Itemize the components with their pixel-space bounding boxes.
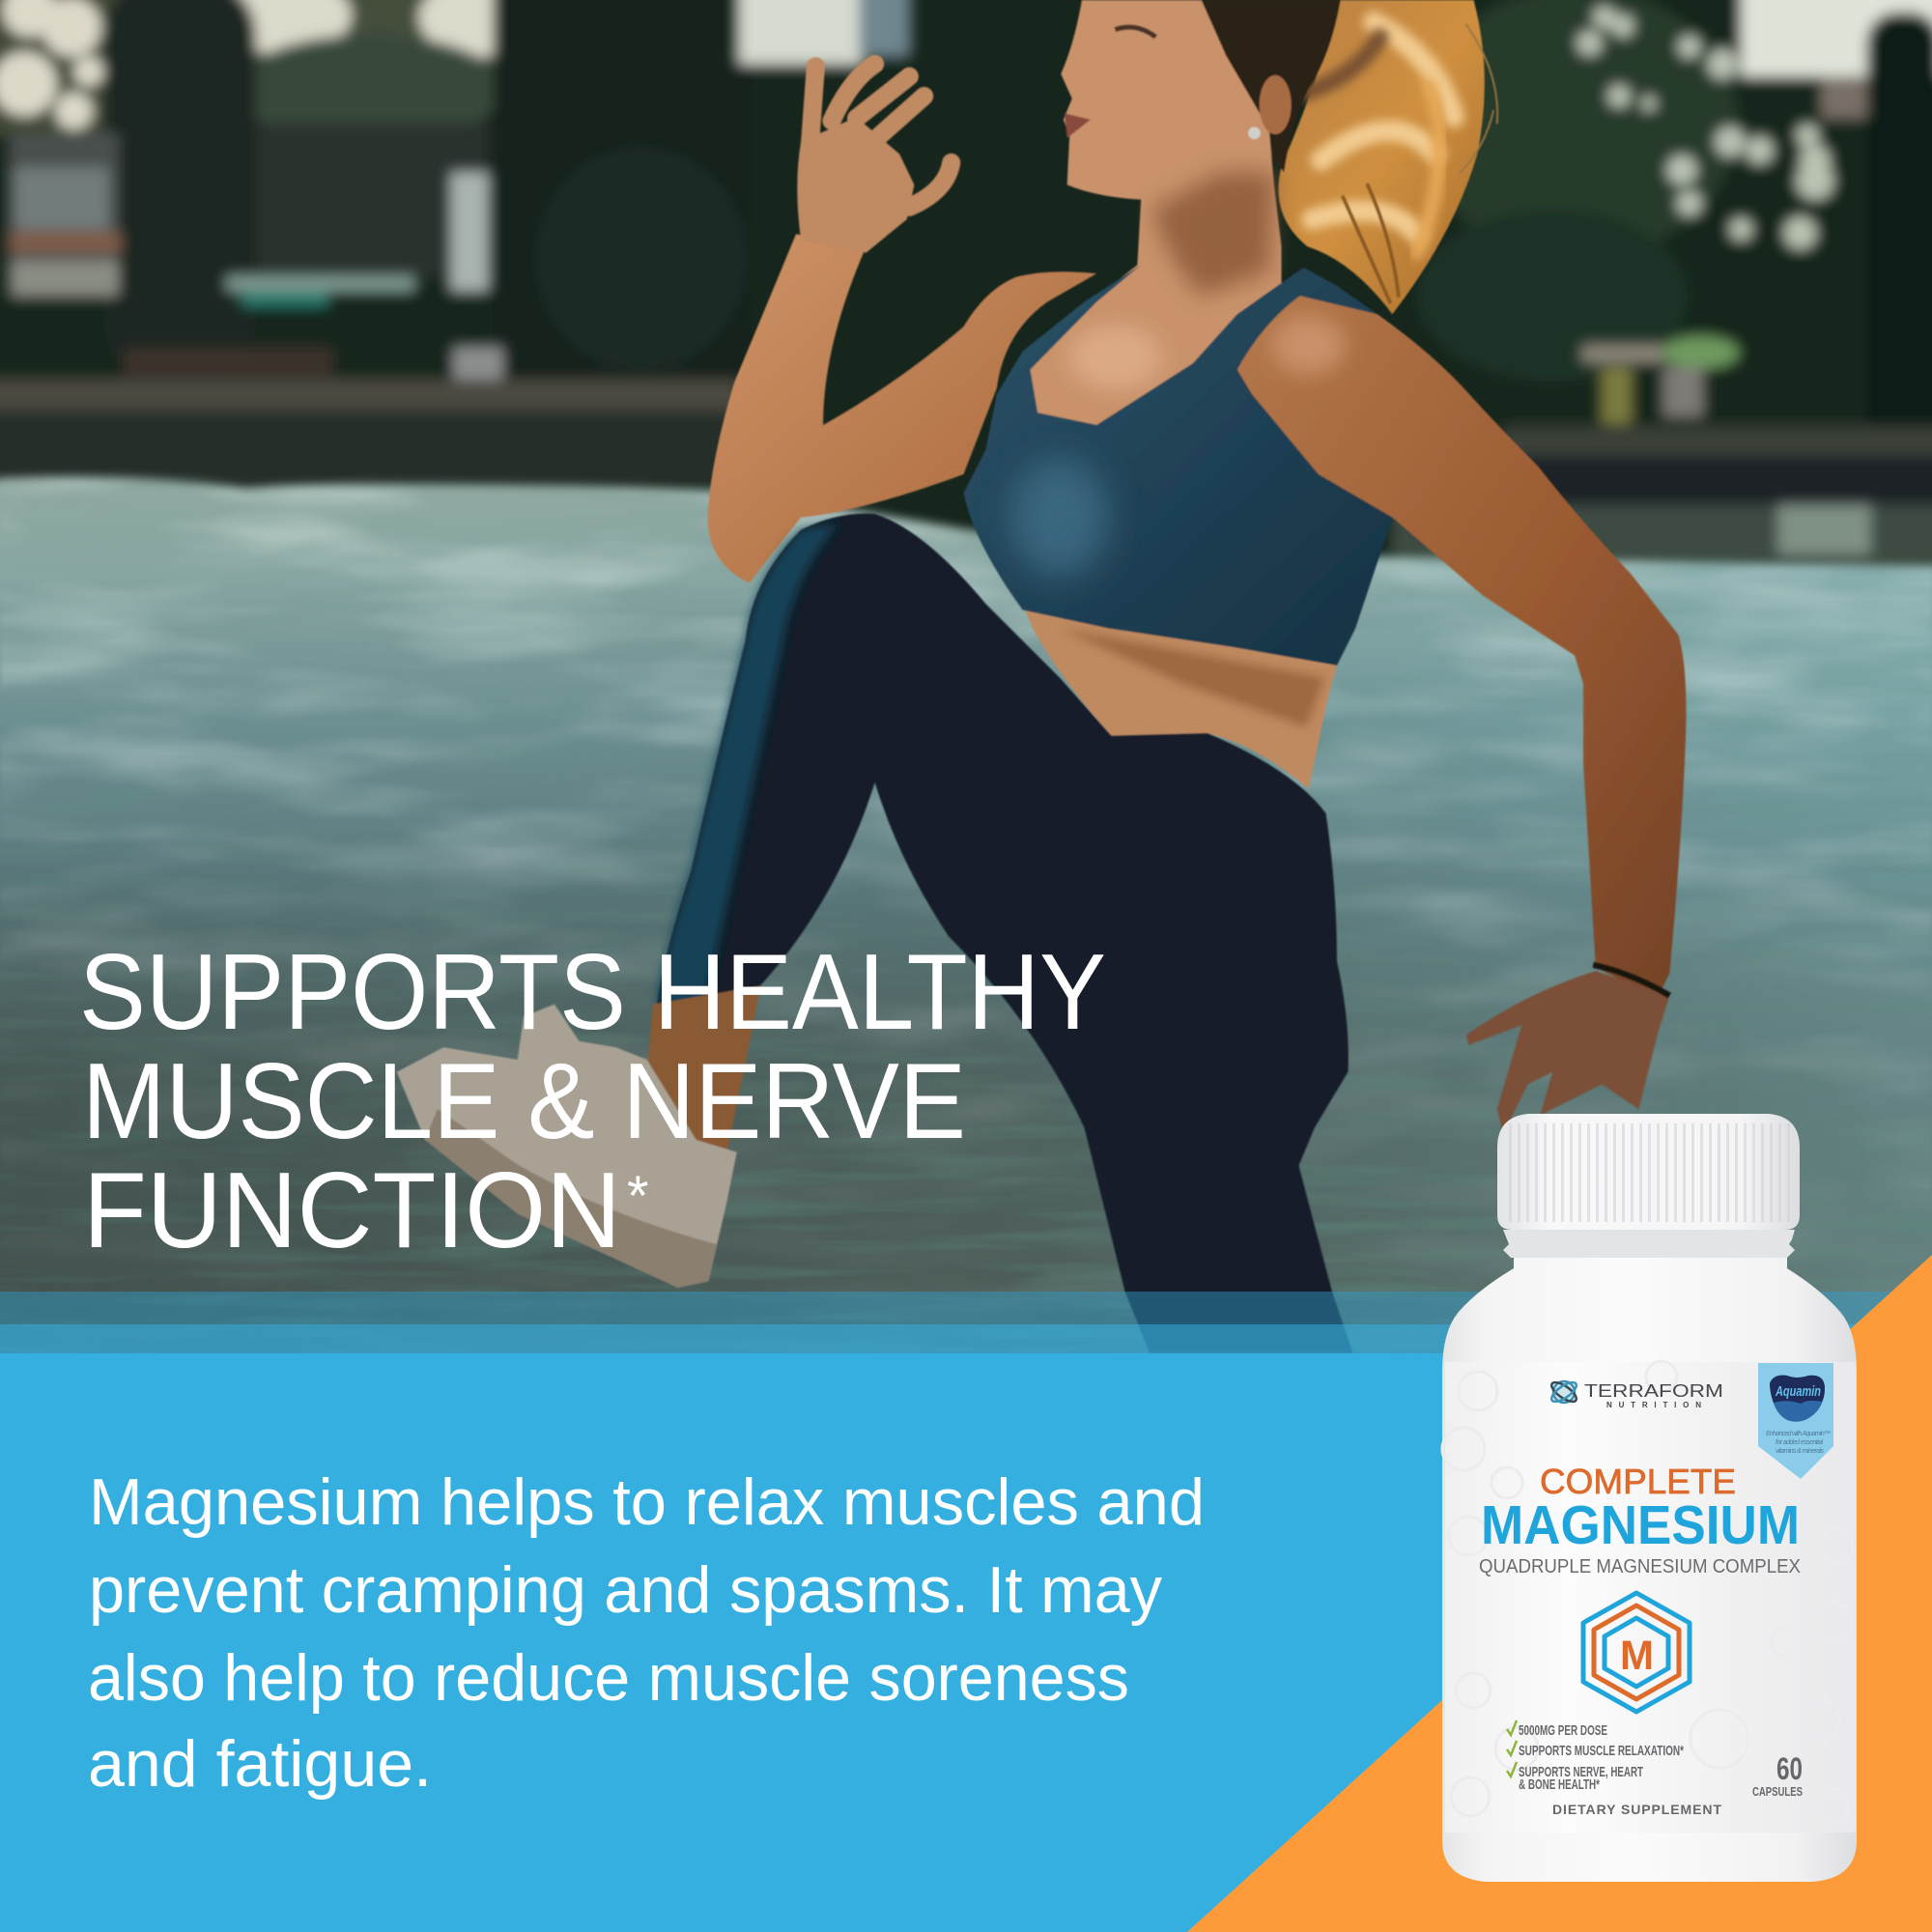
brand name	[1584, 1381, 1723, 1409]
product name	[1479, 1462, 1801, 1577]
body text: also help to reduce muscle soreness	[88, 1641, 1129, 1715]
capsule count: CAPSULES	[1752, 1784, 1803, 1799]
body text: prevent cramping and spasms. It may	[89, 1553, 1162, 1627]
Aquamin badge	[1758, 1363, 1833, 1479]
benefit list: SUPPORTS NERVE, HEART	[1519, 1764, 1643, 1780]
icon: hexagon M: M	[1620, 1633, 1654, 1679]
panel: background photograph	[0, 0, 1932, 1355]
dietary supplement line: DIETARY SUPPLEMENT	[1552, 1802, 1721, 1817]
product name: MAGNESIUM	[1481, 1494, 1800, 1556]
benefit check marks	[1507, 1720, 1517, 1776]
product name: QUADRUPLE MAGNESIUM COMPLEX	[1479, 1556, 1801, 1577]
chest highlight	[1068, 326, 1162, 389]
translucent blue band upper	[0, 1292, 1932, 1324]
raised left arm	[708, 234, 1096, 582]
capsule count	[1752, 1751, 1803, 1799]
trees, buildings and far shore	[0, 0, 1932, 591]
Aquamin badge: for added essential	[1776, 1439, 1823, 1446]
benefit list	[1519, 1722, 1684, 1793]
bottle cap	[1497, 1114, 1800, 1230]
white sneaker	[397, 1005, 737, 1288]
heading	[79, 932, 1106, 1270]
benefit list: 5000MG PER DOSE	[1519, 1722, 1607, 1739]
heading: MUSCLE & NERVE	[82, 1041, 966, 1161]
sleeveless top	[963, 265, 1392, 666]
label	[1445, 1362, 1856, 1833]
ear, lips and eye	[1065, 27, 1292, 139]
product name: COMPLETE	[1540, 1462, 1736, 1501]
abs shadow	[1060, 629, 1324, 727]
label molecule pattern	[1442, 1361, 1853, 1824]
Aquamin badge: vitamins & minerals	[1776, 1448, 1824, 1455]
wristband	[1593, 965, 1669, 996]
orange corner triangle	[1187, 1255, 1932, 1932]
leggings	[657, 514, 1353, 1353]
neck shadow	[1152, 173, 1274, 296]
leggings highlights	[657, 524, 838, 1012]
heading: FUNCTION	[83, 1151, 621, 1270]
icon: hexagon M	[1583, 1593, 1690, 1712]
ankle	[647, 985, 760, 1158]
Aquamin badge: Aquamin	[1775, 1383, 1821, 1400]
raised hand	[797, 64, 952, 252]
woman running	[397, 0, 1686, 1353]
translucent blue band lower	[0, 1324, 1932, 1353]
midriff	[1023, 604, 1337, 788]
neck shading	[1503, 1230, 1795, 1258]
heading: *	[627, 1165, 649, 1228]
ponytail hair	[1202, 0, 1497, 314]
icon: Terraform globe	[1548, 1378, 1579, 1406]
brand name: NUTRITION	[1606, 1401, 1701, 1409]
panel: blue text panel	[0, 1353, 1932, 1932]
heading: SUPPORTS HEALTHY	[79, 932, 1106, 1052]
benefit list: & BONE HEALTH*	[1519, 1776, 1600, 1793]
top highlight	[1010, 458, 1109, 577]
product bottle	[1442, 1114, 1857, 1882]
Aquamin badge: Enhanced with Aquamin™	[1766, 1431, 1831, 1437]
body text	[88, 1465, 1205, 1801]
lake water	[0, 456, 1932, 1355]
body text: Magnesium helps to relax muscles and	[89, 1465, 1205, 1539]
shoulder highlight	[1271, 316, 1346, 375]
benefit list: SUPPORTS MUSCLE RELAXATION*	[1519, 1743, 1684, 1759]
face, neck and chest	[1030, 0, 1282, 425]
bottle body	[1442, 1230, 1857, 1882]
right hand	[1466, 971, 1669, 1133]
right arm	[1237, 296, 1686, 998]
capsule count: 60	[1776, 1751, 1803, 1786]
body text: and fatigue.	[88, 1727, 432, 1801]
brand name: TERRAFORM	[1584, 1381, 1723, 1401]
